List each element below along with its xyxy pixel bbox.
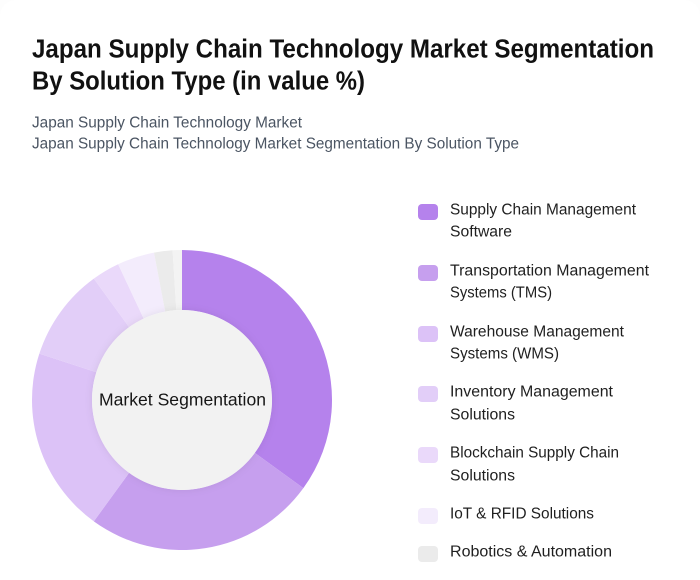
segment: Robotics and Automation bbox=[154, 250, 176, 312]
subtitle: Japan Supply Chain Technology Market bbox=[32, 114, 303, 132]
legend item: Transportation Management Systems: Transportation Management bbox=[450, 262, 650, 280]
legend item: Blockchain Supply Chain Solutions: Blockchain Supply Chain bbox=[450, 444, 619, 462]
subtitle bbox=[32, 114, 519, 152]
legend item: Blockchain Supply Chain Solutions: Solutions bbox=[450, 468, 515, 484]
legend item: Warehouse Management Systems: Warehouse Management bbox=[450, 324, 625, 340]
title: By Solution Type (in value %) bbox=[32, 68, 365, 96]
legend item: Supply Chain Management Software: Software bbox=[450, 224, 512, 240]
segment: Warehouse Management Systems bbox=[32, 354, 129, 521]
legend item: Transportation Management Systems: Systems (TMS) bbox=[450, 284, 552, 302]
legend item: Blockchain Supply Chain Solutions bbox=[418, 444, 619, 484]
donut chart bbox=[32, 250, 332, 550]
title bbox=[32, 36, 654, 96]
legend item: Warehouse Management Systems bbox=[418, 324, 625, 362]
legend item: Inventory Management Solutions bbox=[418, 384, 614, 424]
segment: Supply Chain Management Software bbox=[182, 250, 332, 488]
segment: Inventory Management Solutions bbox=[39, 279, 129, 372]
segment: Transportation Management Systems bbox=[94, 453, 303, 550]
legend item: Transportation Management Systems bbox=[418, 262, 650, 302]
segment: Blockchain Supply Chain Solutions bbox=[94, 264, 144, 327]
title: Japan Supply Chain Technology Market Segmentation bbox=[32, 36, 654, 64]
legend item: Supply Chain Management Software: Supply Chain Management bbox=[450, 202, 637, 218]
legend item: Inventory Management Solutions: Solutions bbox=[450, 406, 515, 424]
segment: IoT and RFID Solutions bbox=[118, 253, 165, 319]
legend bbox=[418, 202, 650, 562]
legend item: Warehouse Management Systems: Systems (WMS) bbox=[450, 346, 559, 362]
legend item: Supply Chain Management Software bbox=[418, 202, 637, 240]
segment: remaining share bbox=[173, 250, 182, 310]
legend item: Robotics and Automation: Robotics & Automation bbox=[450, 544, 612, 560]
centre label: Market Segmentation bbox=[99, 390, 266, 410]
subtitle: Japan Supply Chain Technology Market Segmentation By Solution Type bbox=[32, 136, 519, 152]
legend item: IoT and RFID Solutions: IoT & RFID Solutions bbox=[450, 506, 594, 522]
donut centre bbox=[92, 310, 272, 490]
legend item: Inventory Management Solutions: Inventory Management bbox=[450, 384, 614, 400]
